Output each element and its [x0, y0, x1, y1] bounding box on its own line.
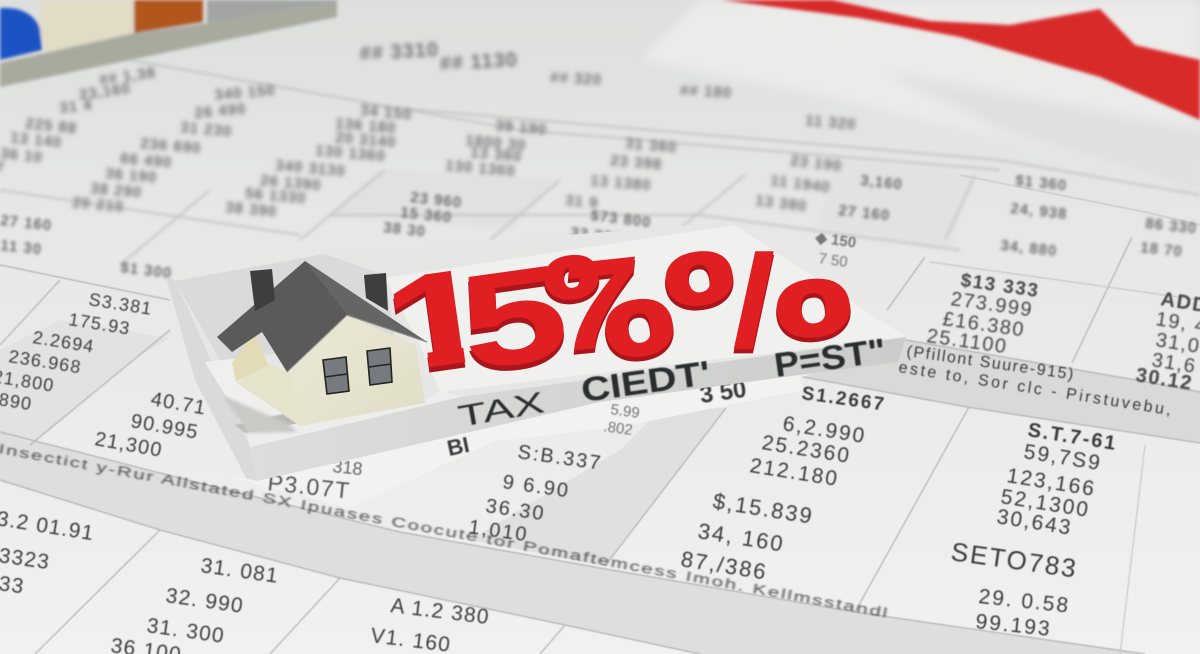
table numbers lower right	[949, 419, 1119, 641]
table numbers left: S3.381	[87, 289, 154, 319]
far blurred numbers: 39 190	[495, 117, 548, 139]
mid-distance numbers: 86 330	[1145, 215, 1198, 237]
15% numerals: 1	[375, 239, 502, 401]
far blurred numbers: ## 3310	[359, 39, 439, 65]
table numbers lower right: 123,166	[1005, 464, 1098, 501]
far blurred numbers: 23,160	[78, 80, 132, 104]
far blurred numbers: 340 3130	[275, 157, 346, 180]
blurred distant grid lines	[0, 60, 1200, 265]
far blurred numbers: 13 140	[10, 129, 63, 151]
mid-distance numbers: 34, 880	[1000, 237, 1058, 260]
paper slip under tray	[225, 375, 803, 508]
far blurred numbers: 31 4	[59, 97, 93, 117]
front wall	[290, 316, 425, 426]
tray floor shadow	[235, 410, 300, 433]
far blurred numbers: 13 1380	[590, 172, 652, 194]
far blurred numbers: 38 390	[225, 199, 278, 221]
far blurred numbers: ## 1,38	[98, 64, 157, 89]
top-left background objects on shelf	[0, 0, 337, 87]
tray with house and 15% sign	[166, 217, 906, 481]
grey box	[207, 0, 337, 23]
table numbers lower right: S.T.7-61	[1026, 419, 1119, 455]
slip numbers: .802	[602, 418, 634, 439]
mid-distance numbers: 24, 938	[1010, 200, 1068, 223]
table numbers upper right: 31,6	[1150, 349, 1198, 378]
cream box	[40, 0, 134, 52]
far blurred numbers: 130 1360	[315, 142, 386, 165]
mid-distance numbers: $73 800	[590, 207, 652, 231]
slip numbers: 5.99	[609, 401, 641, 422]
15% numerals shadow layer: o	[538, 232, 604, 320]
far blurred numbers: 26 490	[194, 101, 247, 122]
far blurred numbers: 225 88	[25, 115, 78, 137]
mid-distance numbers: 3,160	[860, 172, 904, 193]
far blurred numbers: 34 150	[360, 102, 413, 124]
mid-distance numbers: ST	[719, 223, 743, 243]
mid-distance numbers: 11 30	[0, 237, 43, 258]
mid-distance numbers: 33 380	[570, 224, 623, 247]
table numbers lower centre: 36.30	[484, 495, 547, 525]
left chimney	[250, 269, 275, 311]
table numbers left: 2.2694	[31, 327, 96, 357]
table numbers left: 175.93	[67, 309, 132, 339]
left window	[323, 357, 349, 394]
shelf	[0, 3, 337, 87]
far blurred numbers: 130 1360	[445, 157, 516, 180]
far blurred numbers: 23 190	[790, 152, 843, 175]
far blurred numbers: 13 380	[755, 192, 808, 215]
tray side lettering: TAX	[455, 386, 547, 434]
table numbers lower centre: 6,2.990	[781, 412, 868, 448]
inner back wall	[175, 254, 395, 360]
table numbers bottom left: 31. 081	[199, 554, 280, 588]
far blurred numbers: 56 1330	[245, 185, 307, 207]
mid-distance numbers: 38 30	[383, 219, 427, 240]
background top right paper waves	[640, 0, 1200, 190]
table numbers lower right: 59,7S9	[1022, 440, 1103, 475]
far blurred numbers: ## 320	[550, 69, 602, 89]
15% numerals shadow layer: 1	[375, 244, 502, 406]
15% numerals shadow layer: o	[657, 221, 740, 330]
right chimney	[364, 273, 388, 311]
15% numerals: 7	[552, 230, 643, 380]
far blurred numbers: 20 3140	[335, 129, 397, 151]
far blurred numbers: 1800 30	[465, 132, 527, 154]
15% numerals shadow layer: 5	[451, 241, 576, 403]
15% numerals shadow layer: o	[769, 246, 856, 363]
tray side lettering: CIEDT'	[579, 353, 713, 409]
table numbers lower right: SETO783	[949, 536, 1080, 584]
15% numerals shadow layer: o	[596, 267, 681, 383]
mid-distance numbers: 18 70	[1140, 239, 1184, 260]
table numbers lower centre: 212.180	[748, 454, 841, 491]
table numbers upper right: £16.380	[941, 308, 1026, 341]
15% numerals: o	[657, 217, 740, 326]
slip numbers	[266, 376, 748, 504]
dormer	[232, 332, 268, 382]
far blurred numbers: 23 398	[610, 152, 663, 174]
mid-distance numbers	[0, 172, 1198, 282]
far blurred numbers: 36 190	[105, 165, 158, 187]
left wall	[237, 363, 300, 426]
table numbers left: 21,300	[93, 428, 164, 462]
table numbers left	[0, 289, 208, 462]
table numbers lower centre: 34, 160	[696, 518, 786, 557]
15% numerals shadow layer: 7	[552, 234, 643, 384]
far blurred numbers: ## 1130	[439, 49, 518, 75]
table numbers lower centre: S1.2667	[800, 383, 887, 416]
roof	[217, 261, 427, 372]
table numbers lower centre	[467, 383, 887, 585]
table numbers left: 236.968	[7, 346, 83, 377]
far blurred numbers	[0, 39, 857, 221]
table numbers bottom left: 31. 300	[145, 614, 226, 648]
table numbers lower centre: 87,/386	[679, 546, 769, 585]
ground shadow	[222, 395, 297, 433]
table grid lines	[0, 175, 1200, 654]
tray side lettering: P=ST"	[772, 331, 888, 385]
right window	[367, 348, 392, 385]
card numbers showing through: ◆ 150	[813, 229, 857, 252]
card numbers showing through: 7 50	[817, 250, 849, 271]
far blurred numbers: 31 230	[180, 119, 233, 141]
table numbers lower centre: $,15.839	[711, 488, 816, 529]
right strip caption: (Pfillont Suure-915)	[905, 343, 1076, 384]
table numbers lower right: 30,643	[995, 505, 1074, 540]
far blurred numbers: 11 1940	[770, 172, 832, 196]
far blurred numbers: 31 9	[565, 192, 599, 212]
far blurred numbers: ## 180	[680, 82, 732, 102]
table numbers lower centre: S:B.337	[516, 441, 604, 475]
far blurred numbers: 38 290	[90, 180, 143, 202]
model house	[217, 261, 427, 433]
table numbers bottom left	[0, 507, 491, 654]
table numbers lower centre: 25.2360	[760, 431, 853, 468]
card numbers showing through	[813, 229, 857, 271]
far blurred numbers: 136 180	[335, 115, 397, 137]
white card under numerals	[385, 225, 906, 392]
table numbers left: 40.71	[149, 388, 208, 420]
roof front edge	[287, 315, 427, 372]
table numbers bottom left: A 1.2 380	[389, 594, 491, 629]
orange box	[134, 0, 203, 33]
15% numerals	[394, 251, 850, 368]
slip numbers: 3 50	[698, 376, 748, 409]
far blurred numbers: 20 210	[72, 194, 125, 216]
slip numbers: 318	[332, 456, 364, 479]
15% numerals: o	[769, 242, 856, 359]
mid-distance numbers: 15 360	[400, 204, 453, 226]
bottom strip caption: Insectict y-Rur Allstated SX Ipuases Coocute tor Pomaftemcess Imoh. Kellmsstandl	[0, 440, 891, 621]
15% numerals shadow layer: /	[733, 232, 775, 378]
tray floor highlight	[205, 358, 300, 433]
blue bottle	[0, 8, 42, 60]
15% numerals: 5	[451, 236, 576, 398]
slip numbers: BI	[445, 432, 472, 461]
mid-distance numbers: 23 960	[410, 189, 463, 211]
red flag stripe	[722, 0, 1200, 120]
tray floor	[175, 222, 906, 447]
mid-distance numbers: 27 160	[0, 212, 53, 234]
table numbers upper right: $13 333	[959, 270, 1041, 302]
shaded table cells	[0, 160, 1200, 654]
far blurred numbers: 36 10	[0, 145, 44, 166]
far blurred numbers: 31 360	[625, 135, 678, 157]
far blurred numbers: 26 1390	[260, 172, 322, 194]
far blurred numbers: 236 690	[140, 135, 202, 157]
far blurred numbers: 66 490	[120, 150, 173, 172]
table numbers lower centre: 1,010	[467, 516, 530, 546]
mid-distance numbers: $1 300	[120, 259, 173, 282]
tray front rim	[247, 390, 460, 447]
mid-distance numbers: $1 360	[1015, 172, 1068, 194]
table numbers lower centre: 9 6.90	[501, 471, 571, 502]
slip numbers: P3.07T	[266, 469, 352, 504]
15% numerals shadow layer	[393, 255, 851, 372]
tray left rim	[166, 277, 257, 481]
table numbers upper right: 30.12	[1134, 364, 1195, 395]
table numbers left: 90.995	[129, 410, 200, 444]
table numbers upper right	[925, 270, 1200, 395]
tray side lettering	[455, 331, 888, 434]
far blurred numbers: 13 360	[470, 144, 523, 166]
table numbers upper right: 25.1100	[925, 325, 1009, 358]
table numbers lower right: 29. 0.58	[977, 585, 1071, 618]
tray front side	[250, 337, 906, 481]
table numbers lower right: 99.193	[974, 610, 1053, 641]
table numbers lower right: 52,1300	[999, 485, 1092, 522]
15% numerals: o	[538, 228, 604, 316]
15% numerals: o	[596, 263, 681, 379]
table numbers bottom left: 32. 990	[164, 584, 245, 618]
far blurred numbers: 11 320	[805, 112, 857, 133]
right strip caption: este to, Sor clc - Pirstuvebu,	[897, 359, 1175, 419]
table numbers upper right: 273.999	[949, 288, 1034, 321]
far blurred numbers: 340 150	[214, 82, 276, 104]
15% numerals: /	[733, 228, 775, 374]
mid-distance numbers: 27 160	[838, 202, 891, 224]
